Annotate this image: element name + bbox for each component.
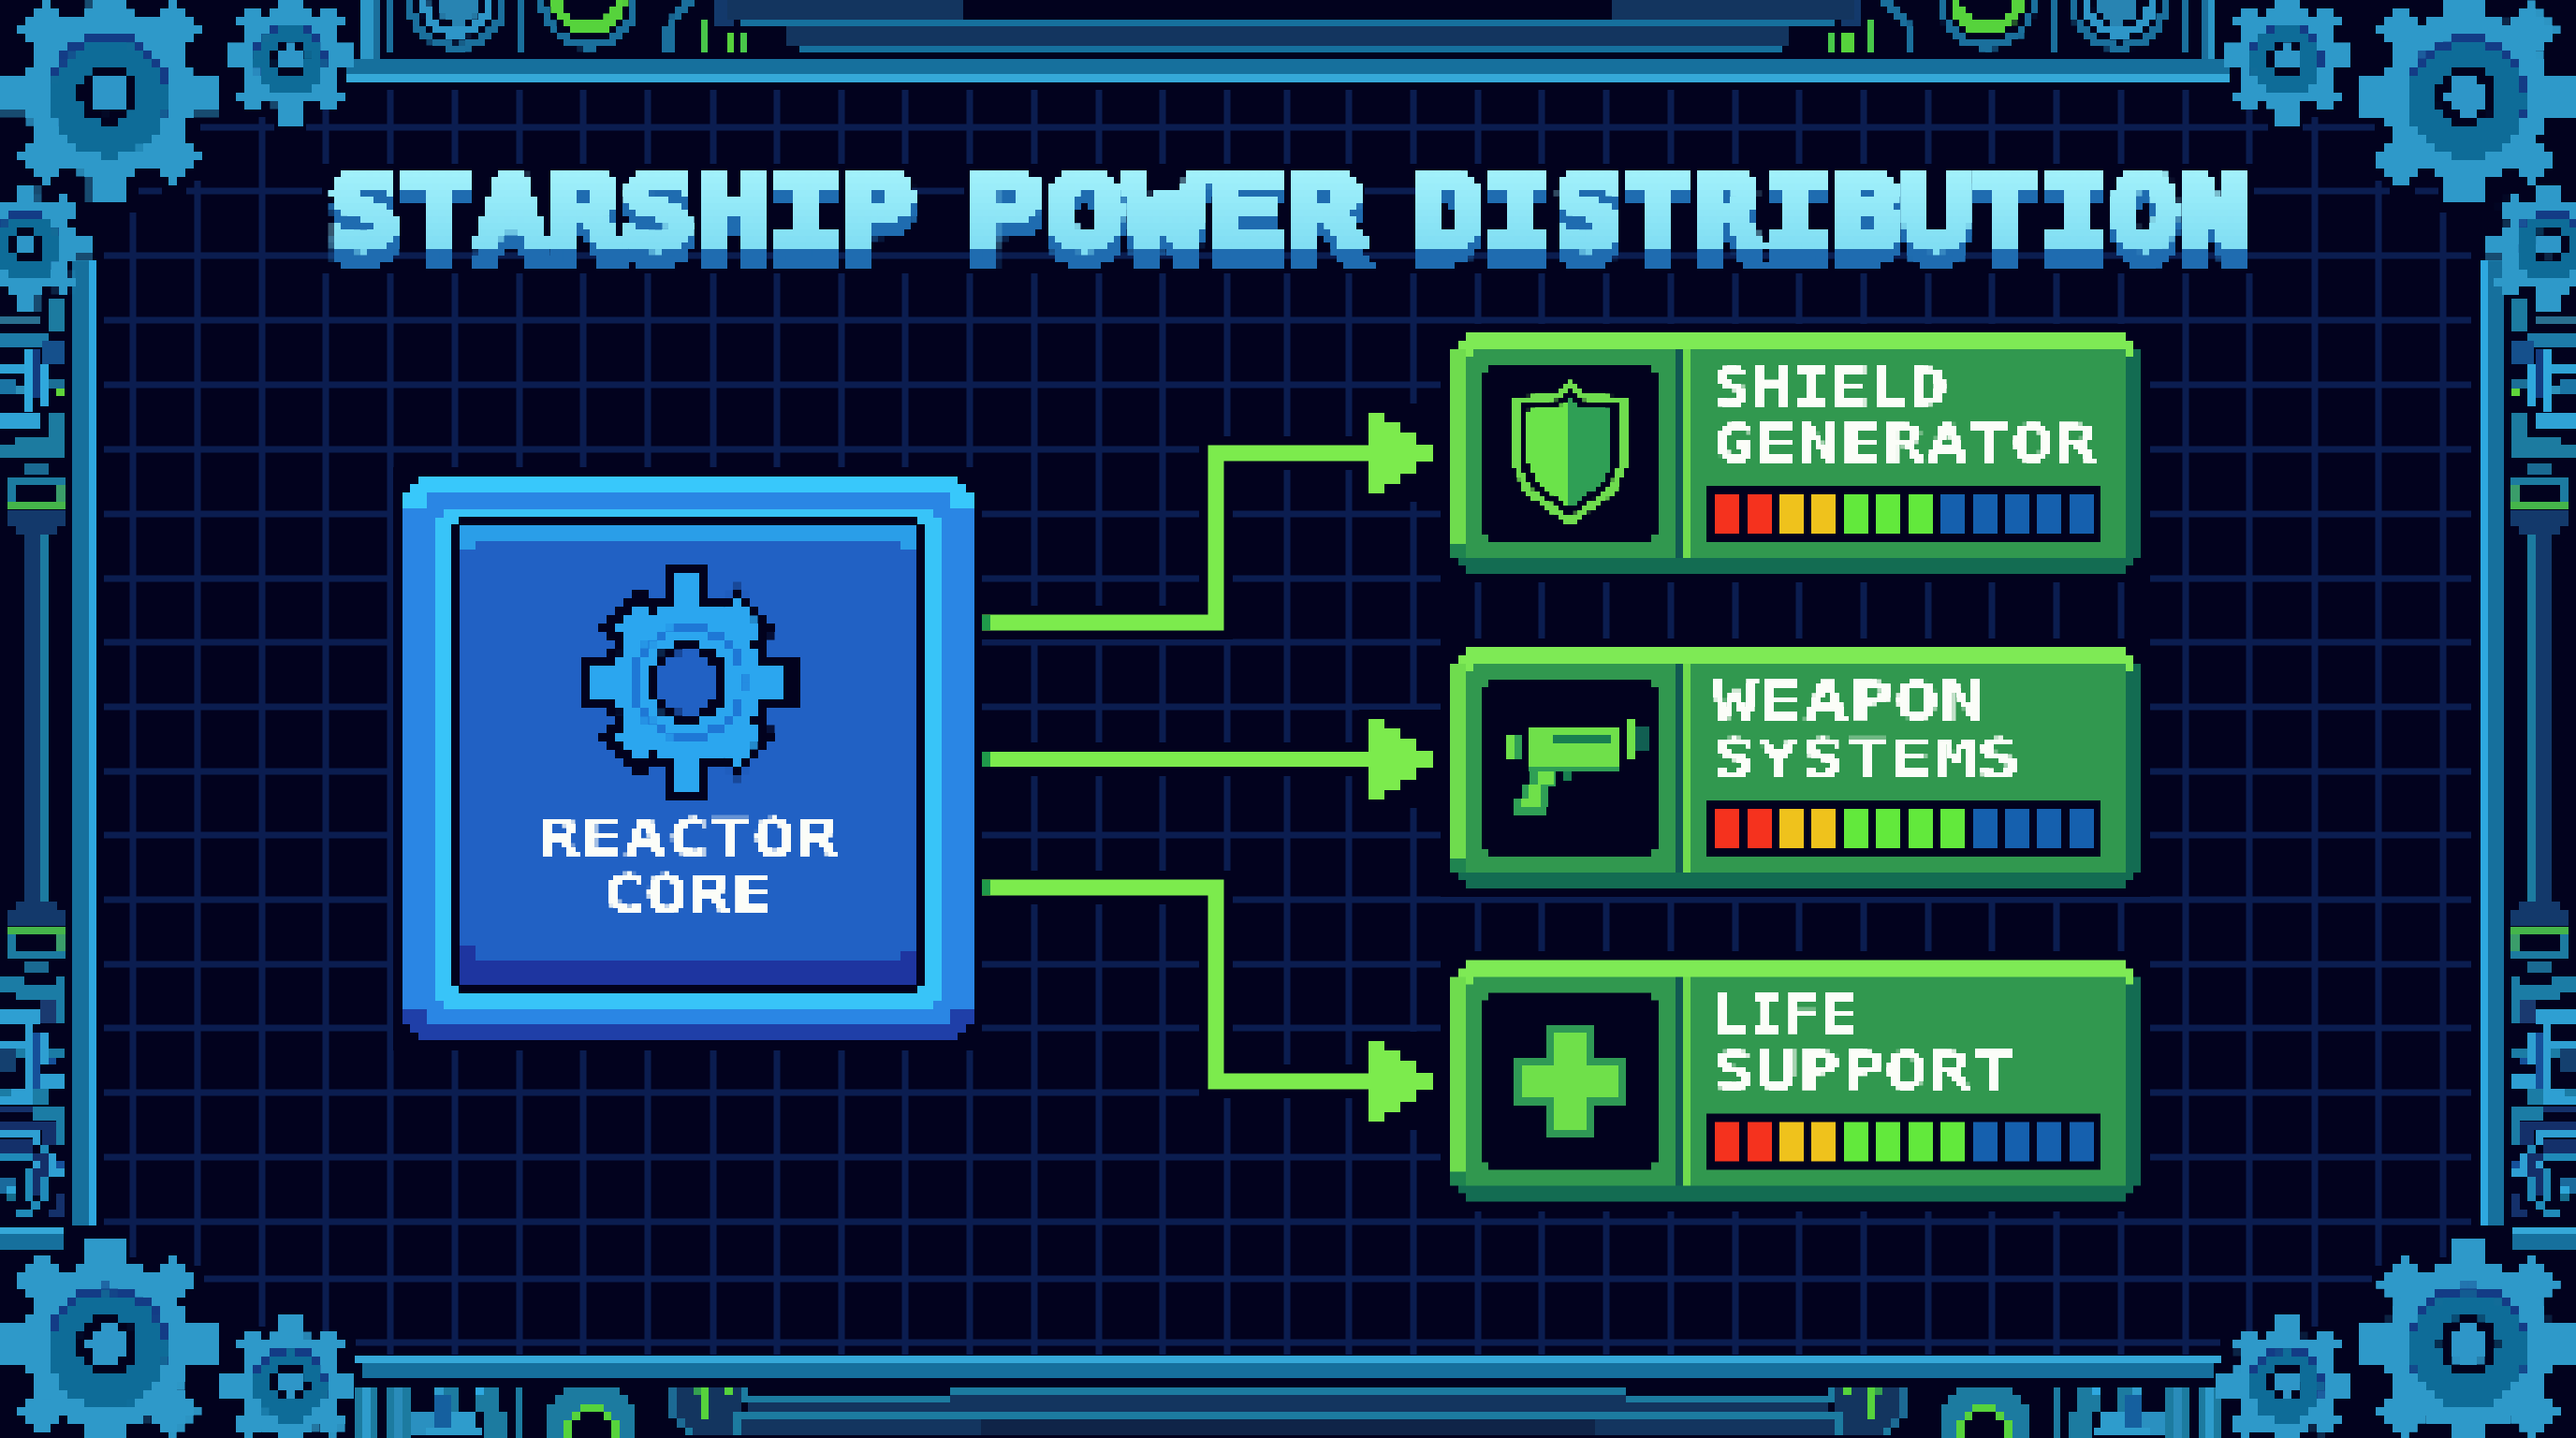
weapon label: WEAPON (1712, 671, 1985, 732)
title: DISTRIBUTION (1414, 153, 2249, 271)
shield label (1712, 358, 2097, 475)
weapon label: SYSTEMS (1712, 728, 2021, 789)
life support label: SUPPORT (1712, 1041, 2014, 1102)
arrow: reactor to weapon systems (982, 719, 1433, 800)
power meter: weapons (1706, 800, 2100, 857)
gear: top left large (0, 0, 219, 204)
left side machinery (0, 299, 66, 1217)
frame: bottom bar (355, 1356, 2221, 1378)
power meter: life support (1706, 1114, 2100, 1170)
arrow: reactor to shield generator (982, 413, 1433, 630)
title: DISTRIBUTION (1414, 169, 2249, 287)
top frame machinery (363, 0, 2213, 59)
frame: lower right bar stub (2512, 1227, 2576, 1250)
title (328, 153, 2249, 287)
reactor label (537, 808, 839, 925)
life support label (1712, 985, 2014, 1102)
power meter: shield (1706, 486, 2100, 542)
arrow: reactor to life support (982, 880, 1433, 1122)
title: STARSHIP (328, 169, 915, 287)
title: STARSHIP (328, 153, 915, 271)
shield label: GENERATOR (1712, 414, 2097, 475)
reactor label: CORE (602, 864, 774, 925)
title: POWER (964, 169, 1367, 287)
panel: weapon systems (1450, 647, 2141, 888)
panel: life support (1450, 961, 2141, 1202)
gear: top right small (2220, 0, 2351, 124)
panel: shield generator (1450, 332, 2141, 574)
life support label: LIFE (1712, 985, 1857, 1046)
frame: right bar (2481, 260, 2504, 1225)
gear: top left small (225, 0, 356, 124)
bottom frame machinery (355, 1387, 2221, 1438)
icon: blaster (1506, 719, 1649, 815)
gear: bottom left small (223, 1316, 358, 1438)
gear: top right large (2356, 0, 2576, 206)
right side machinery (2510, 299, 2576, 1217)
gear: bottom right small (2218, 1316, 2353, 1438)
gear: bottom left large (0, 1235, 218, 1438)
icon: cross (1514, 1025, 1626, 1137)
frame: top bar (346, 59, 2230, 82)
shield label: SHIELD (1712, 358, 1948, 418)
frame: lower left bar stub (0, 1227, 64, 1250)
icon: reactor gear (579, 565, 797, 800)
icon: shield (1514, 381, 1627, 526)
reactor label: REACTOR (537, 808, 839, 869)
reactor frame (402, 477, 974, 1040)
panel: reactor core (402, 477, 974, 1040)
frame: left bar (72, 260, 96, 1225)
gear: left upper (0, 182, 90, 309)
gear: bottom right large (2358, 1235, 2576, 1438)
title: POWER (964, 153, 1367, 271)
gear: right upper (2486, 182, 2576, 309)
weapon label (1712, 671, 2021, 789)
